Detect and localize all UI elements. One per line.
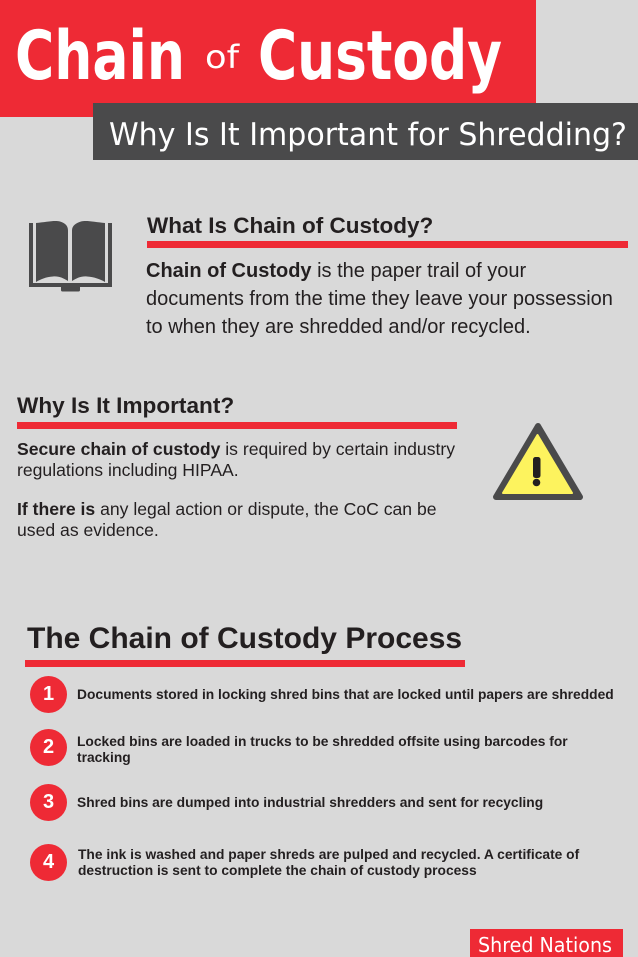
brand badge	[470, 929, 623, 957]
number badge	[30, 784, 67, 821]
section: process	[25, 622, 465, 667]
step text: Shred bins are dumped into industrial shredders and sent for recycling	[77, 795, 543, 810]
underline	[147, 241, 628, 248]
paragraph 2: used as evidence.	[17, 520, 159, 540]
number badge: 1	[43, 683, 54, 705]
step 3	[30, 784, 543, 821]
body text: documents from the time they leave your possession	[146, 288, 613, 310]
body text: to when they are shredded and/or recycled.	[146, 316, 531, 338]
heading: What Is Chain of Custody?	[147, 213, 433, 238]
paragraph 1	[17, 439, 455, 480]
step text: tracking	[77, 750, 131, 764]
section: what is chain of custody	[146, 213, 628, 338]
step 2	[30, 729, 568, 766]
number badge	[30, 676, 67, 713]
step text	[77, 734, 568, 765]
underline	[25, 660, 465, 667]
subtitle banner	[93, 103, 638, 160]
step 1	[30, 676, 614, 713]
brand text: Shred Nations	[478, 933, 612, 957]
underline	[17, 422, 457, 429]
step 4	[30, 844, 580, 881]
title text: Chain	[15, 17, 185, 96]
title text	[15, 17, 502, 96]
number badge	[30, 729, 67, 766]
paragraph 1: Secure chain of custody is required by certain industry	[17, 439, 455, 459]
icon: warning triangle	[493, 423, 583, 500]
body text: Chain of Custody is the paper trail of your	[146, 260, 526, 282]
paragraph 2: If there is any legal action or dispute, the CoC can be	[17, 499, 437, 519]
number badge: 4	[43, 851, 54, 873]
paragraph 1: regulations including HIPAA.	[17, 460, 239, 480]
title text: of	[205, 38, 240, 76]
section: why is it important	[17, 393, 457, 540]
step text: destruction is sent to complete the chain of custody process	[78, 862, 477, 878]
subtitle text: Why Is It Important for Shredding?	[109, 117, 627, 153]
title banner	[0, 0, 536, 117]
body text	[146, 260, 613, 338]
step text: The ink is washed and paper shreds are pulped and recycled. A certificate of	[78, 847, 579, 862]
number badge: 3	[43, 791, 54, 813]
number badge: 2	[43, 736, 54, 758]
icon: open book	[29, 221, 112, 292]
heading: Why Is It Important?	[17, 393, 234, 418]
heading: The Chain of Custody Process	[27, 622, 462, 655]
paragraph 2	[17, 499, 437, 540]
step text: Locked bins are loaded in trucks to be shredded offsite using barcodes for	[77, 734, 568, 749]
step text	[78, 847, 580, 878]
number badge	[30, 844, 67, 881]
step text: Documents stored in locking shred bins that are locked until papers are shredded	[77, 687, 614, 702]
